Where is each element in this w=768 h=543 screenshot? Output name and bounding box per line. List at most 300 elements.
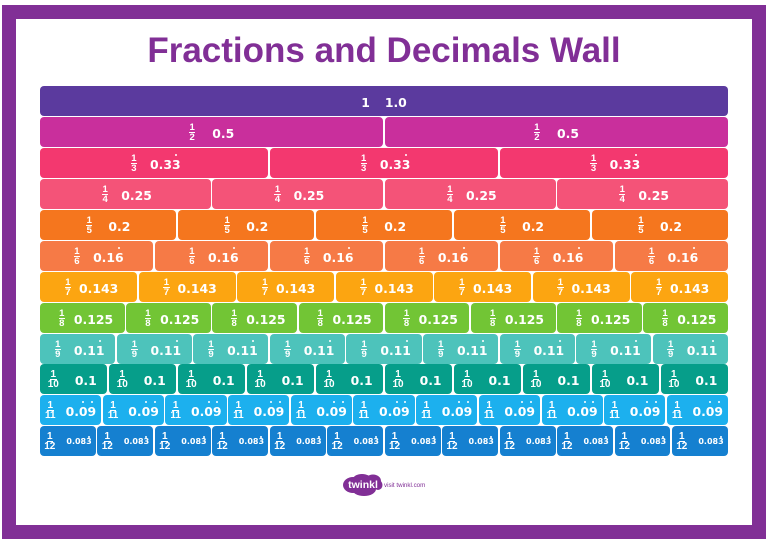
cell: 1/6: 0.16 — [553, 250, 583, 264]
cell: 1/9: 0.11 — [610, 342, 641, 358]
row: eighths — [40, 303, 728, 333]
cell: 1/11: 11 — [609, 410, 620, 420]
cell: 1/12: 12 — [504, 440, 515, 452]
cell: 1/12: 0.083 — [641, 436, 666, 446]
cell: 1/12 — [155, 426, 211, 456]
cell: 1/8: 1 — [404, 308, 409, 318]
cell: 1/5: 0.2 — [522, 218, 544, 234]
cell: 1/12: 12 — [619, 440, 630, 452]
cell: 1/9: 9 — [208, 348, 214, 360]
cell: 1/9 — [423, 334, 498, 364]
cell: 1/5 — [454, 210, 590, 240]
cell: 1/10 — [178, 364, 245, 394]
cell: 1/8: 0.125 — [160, 312, 199, 326]
cell: 1/10 — [592, 364, 659, 394]
cell: 1/6: 1 — [419, 246, 424, 256]
cell: 1/9 — [40, 334, 115, 364]
cell: 1/12 — [385, 426, 441, 456]
cell: 1/8: 1 — [662, 308, 668, 318]
cell: 1/7: 7 — [361, 286, 366, 298]
cell: 1/11: 11 — [484, 410, 494, 420]
cell: 1/12 — [40, 426, 96, 456]
cell: 1/5 — [592, 210, 728, 240]
cell: 1/6: 0.16 — [208, 250, 239, 264]
cell: 1/9: 9 — [362, 348, 367, 360]
row: sevenths — [40, 272, 728, 302]
cell: 1/7: 0.143 — [375, 280, 414, 296]
cell: 1/11: 11 — [421, 410, 432, 420]
cell: 1/4: 0.25 — [294, 188, 324, 202]
cell: 1/8: 0.125 — [332, 312, 372, 326]
cell: 1/3 — [270, 148, 498, 178]
cell: 1/5: 5 — [362, 224, 368, 236]
cell: 1/6: 6 — [419, 256, 424, 266]
cell: 1/11: 1 — [424, 400, 429, 410]
cell: 1/12: 0.083 — [698, 436, 724, 446]
cell: 1/5: 5 — [224, 224, 230, 236]
cell: 1/12: 12 — [561, 440, 572, 452]
cell: 1/10: 1 — [119, 368, 125, 380]
cell: 1/9: 1 — [55, 338, 60, 350]
cell: 1/11: 11 — [108, 410, 118, 420]
cell: 1/12: 1 — [277, 430, 282, 442]
cell: 1/6: 0.16 — [323, 250, 353, 264]
cell: 1/9: 1 — [515, 338, 520, 350]
cell: 1/8 — [126, 303, 211, 333]
cell: 1/9 — [193, 334, 268, 364]
cell: 1/12: 12 — [676, 440, 687, 452]
cell: 1/7: 1 — [558, 276, 563, 288]
cell: 1/10: 0.1 — [351, 372, 373, 388]
cell: 1/9: 0.11 — [74, 342, 104, 358]
icon: logo cloud — [343, 474, 382, 496]
cell: 1/2: 1 — [534, 122, 540, 132]
cell: 1/7: 1 — [459, 276, 465, 288]
cell: 1/6: 1 — [74, 246, 80, 256]
twinkl logo — [343, 474, 425, 496]
cell: 1/11: 11 — [296, 410, 306, 420]
cell: 1/12: 1 — [507, 430, 512, 442]
cell: 1/11: 1 — [486, 400, 492, 410]
cell: 1/10: 1 — [257, 368, 263, 380]
cell: 1/4: 4 — [102, 194, 108, 204]
cell: 1/7: 0.143 — [572, 280, 611, 296]
cell: 1/6: 6 — [189, 256, 194, 266]
cell: 1/12: 12 — [159, 440, 170, 452]
cell: 1/9 — [346, 334, 422, 364]
cell: 1/8 — [643, 303, 728, 333]
cell: 1/5: 1 — [87, 214, 92, 226]
cell: 1/11: 0.09 — [692, 404, 723, 418]
row: ninths — [40, 334, 728, 364]
cell: 1/8: 0.125 — [246, 312, 285, 326]
cell: 1/4 — [212, 179, 383, 209]
cell: 1/9: 0.11 — [304, 342, 334, 358]
cell: 1/3: 3 — [361, 162, 366, 174]
cell: 1/9: 1 — [132, 338, 137, 350]
cell: 1/12: 0.083 — [296, 436, 322, 446]
cell: 1/5: 0.2 — [660, 218, 682, 234]
cell: 1/7 — [138, 272, 236, 302]
cell: 1/8: 8 — [576, 318, 582, 328]
cell: 1/3: 0.33 — [150, 156, 181, 172]
cell: 1/11: 0.09 — [630, 404, 660, 418]
cell: 1/7 — [631, 272, 728, 302]
cell: 1/7 — [237, 272, 334, 302]
cell: 1/5: 1 — [638, 214, 644, 226]
cell: 1/8 — [40, 303, 125, 333]
cell: 1/12: 1 — [219, 430, 225, 442]
cell: 1/2 — [385, 117, 728, 147]
cell: 1/4: 0.25 — [121, 188, 152, 202]
cell: 1: 1 — [361, 94, 370, 110]
cell: 1/6: 6 — [74, 256, 80, 266]
cell: 1/9 — [117, 334, 192, 364]
cell: 1/9: 9 — [132, 348, 137, 360]
cell: 1/11: 1 — [48, 400, 53, 410]
cell: 1/12: 12 — [274, 440, 285, 452]
cell: 1/10: 10 — [530, 378, 541, 390]
cell: 1/8: 1 — [318, 308, 323, 318]
cell: 1: 1.0 — [385, 94, 407, 110]
cell: 1/9: 9 — [668, 348, 673, 360]
cell: 1/9: 9 — [285, 348, 290, 360]
row: one whole — [40, 86, 728, 116]
cell: 1/8: 1 — [576, 308, 582, 318]
cell: 1/7 — [336, 272, 432, 302]
cell: 1/6: 6 — [649, 256, 654, 266]
cell: 1/9: 9 — [55, 348, 60, 360]
cell: 1/6: 0.16 — [668, 250, 698, 264]
cell: 1/2: 2 — [534, 132, 540, 142]
cell: 1/2: 0.5 — [557, 126, 579, 140]
cell: 1/3: 1 — [131, 152, 137, 164]
cell: 1/5: 1 — [224, 214, 230, 226]
cell: 1/4 — [40, 179, 211, 209]
cell: 1/7: 7 — [656, 286, 662, 298]
cell: 1/9 — [653, 334, 728, 364]
cell: 1/12 — [557, 426, 613, 456]
cell: 1/9: 1 — [362, 338, 367, 350]
cell: 1/10: 1 — [464, 368, 470, 380]
cell: 1/11: 1 — [298, 400, 304, 410]
cell: 1/11 — [228, 395, 289, 425]
cell: 1/4: 1 — [447, 184, 453, 194]
cell: 1/11 — [103, 395, 164, 425]
cell: 1/4: 0.25 — [466, 188, 497, 202]
cell: 1/7: 7 — [164, 286, 169, 298]
cell: 1/7: 0.143 — [670, 280, 709, 296]
cell: 1/8 — [212, 303, 297, 333]
row: fifths — [40, 210, 728, 240]
cell: 1/6: 1 — [534, 246, 539, 256]
cell: 1/9 — [500, 334, 575, 364]
cell: 1/7: 1 — [65, 276, 71, 288]
cell: 1/12 — [212, 426, 268, 456]
cell: 1/10 — [109, 364, 176, 394]
cell: 1/12: 12 — [102, 440, 113, 452]
cell: 1/10 — [661, 364, 728, 394]
cell: 1/8: 0.125 — [74, 312, 113, 326]
cell: 1/9: 9 — [438, 348, 443, 360]
cell: 1/11 — [40, 395, 101, 425]
cell: 1/9: 1 — [591, 338, 597, 350]
cell: 1/2 — [40, 117, 383, 147]
cell: 1/11: 0.09 — [316, 404, 347, 418]
cell: 1/12: 1 — [334, 430, 340, 442]
cell: 1/10: 1 — [602, 368, 608, 380]
cell: 1/10: 1 — [671, 368, 677, 380]
cell: 1/12: 1 — [392, 430, 397, 442]
cell: 1/11: 0.09 — [504, 404, 535, 418]
cell: 1/6 — [385, 241, 498, 271]
cell: 1/11: 1 — [173, 400, 178, 410]
cell: 1/12 — [270, 426, 326, 456]
cell: 1/10: 10 — [668, 378, 679, 390]
cell: 1/9 — [576, 334, 651, 364]
cell: 1/12: 0.083 — [526, 436, 551, 446]
row: sixths — [40, 241, 728, 271]
cell: 1/6: 1 — [304, 246, 309, 256]
cell: 1/7: 1 — [164, 276, 169, 288]
cell: 1/10: 1 — [395, 368, 401, 380]
cell: 1/9: 0.11 — [687, 342, 717, 358]
cell: 1/10: 1 — [188, 368, 194, 380]
cell: 1/11: 0.09 — [191, 404, 222, 418]
cell: 1/11: 0.09 — [254, 404, 284, 418]
cell: 1/8: 0.125 — [419, 312, 458, 326]
cell: 1/10: 0.1 — [75, 372, 97, 388]
cell: 1/8: 1 — [59, 308, 64, 318]
cell: 1/8 — [471, 303, 556, 333]
cell: 1/7: 0.143 — [79, 280, 118, 296]
cell: 1/11 — [667, 395, 728, 425]
row: tenths — [40, 364, 728, 394]
cell: 1/11 — [542, 395, 603, 425]
cell: 1/10: 1 — [533, 368, 539, 380]
cell: 1/10: 1 — [50, 368, 56, 380]
cell: 1/7 — [434, 272, 531, 302]
cell: 1/3: 3 — [591, 162, 596, 174]
cell: 1/11: 0.09 — [567, 404, 598, 418]
cell: 1/10: 0.1 — [557, 372, 579, 388]
cell: 1/8: 8 — [662, 318, 668, 328]
cell: 1/12 — [327, 426, 383, 456]
cell: 1/11: 1 — [361, 400, 366, 410]
cell: 1/5: 0.2 — [246, 218, 268, 234]
cell: 1/3: 1 — [361, 152, 366, 164]
cell: 1/6 — [270, 241, 383, 271]
cell: 1/11: 0.09 — [128, 404, 159, 418]
cell: 1/7: 0.143 — [178, 280, 217, 296]
row: halves — [40, 117, 728, 147]
row: elevenths — [40, 395, 728, 425]
cell: 1/5: 0.2 — [384, 218, 406, 234]
cell: 1/12: 0.083 — [239, 436, 264, 446]
cell: 1/8: 0.125 — [505, 312, 544, 326]
cell: 1/6: 0.16 — [438, 250, 468, 264]
cell: 1/5: 0.2 — [108, 218, 130, 234]
cell: 1/12: 1 — [622, 430, 627, 442]
cell: 1/12: 1 — [679, 430, 685, 442]
cell: 1/9: 0.11 — [151, 342, 181, 358]
cell: 1/11: 1 — [549, 400, 555, 410]
title: Fractions and Decimals Wall — [147, 31, 621, 70]
cell: 1/11 — [353, 395, 415, 425]
cell: 1/10: 0.1 — [213, 372, 235, 388]
cell: 1/6 — [615, 241, 728, 271]
cell: 1/9: 0.11 — [380, 342, 411, 358]
cell: 1/11 — [479, 395, 540, 425]
cell: 1/6: 6 — [534, 256, 539, 266]
row: thirds — [40, 148, 728, 178]
cell: 1/10 — [385, 364, 452, 394]
cell: 1/3: 1 — [591, 152, 596, 164]
cell: 1/12: 0.083 — [66, 436, 92, 446]
cell: 1/12: 0.083 — [181, 436, 207, 446]
cell: 1/9: 0.11 — [457, 342, 488, 358]
cell: 1/8: 1 — [145, 308, 151, 318]
cell: 1/7: 7 — [558, 286, 563, 298]
cell: 1/4 — [557, 179, 728, 209]
cell: 1/6 — [155, 241, 268, 271]
cell: 1/7 — [40, 272, 137, 302]
cell: 1/4: 1 — [102, 184, 108, 194]
cell: 1/9: 9 — [515, 348, 520, 360]
cell: 1/5: 1 — [362, 214, 368, 226]
cell: 1/10: 0.1 — [489, 372, 510, 388]
cell: 1/9: 1 — [285, 338, 290, 350]
cell: 1/5 — [178, 210, 314, 240]
cell: 1/10 — [523, 364, 590, 394]
cell: 1/12: 1 — [47, 430, 53, 442]
cell: 1/12: 12 — [446, 440, 458, 452]
cell: 1/3 — [40, 148, 268, 178]
cell: 1/7 — [532, 272, 630, 302]
cell: 1/12: 1 — [449, 430, 455, 442]
logo word: twinkl — [348, 479, 378, 491]
cell: 1/12: 0.083 — [354, 436, 379, 446]
cell: 1/10: 1 — [326, 368, 332, 380]
cell: 1/10: 10 — [599, 378, 610, 390]
cell: 1/11: 0.09 — [379, 404, 410, 418]
cell: 1/8: 1 — [490, 308, 495, 318]
cell: 1/8 — [385, 303, 469, 333]
cell: 1/8: 0.125 — [677, 312, 716, 326]
cell: 1/11 — [165, 395, 227, 425]
cell: 1/11: 0.09 — [66, 404, 96, 418]
cell: 1/6: 6 — [304, 256, 309, 266]
cell: 1/11 — [416, 395, 477, 425]
cell: 1/12: 0.083 — [124, 436, 149, 446]
cell: 1/10 — [247, 364, 314, 394]
cell: 1/3 — [500, 148, 728, 178]
cell: 1/8 — [557, 303, 642, 333]
cell: 1/8: 8 — [145, 318, 151, 328]
cell: 1/9: 0.11 — [534, 342, 564, 358]
cell: 1/3: 0.33 — [380, 156, 410, 172]
cell: 1/8: 8 — [231, 318, 237, 328]
cell: 1/6 — [40, 241, 153, 271]
cell: 1/8: 8 — [59, 318, 64, 328]
cell: 1/12 — [672, 426, 728, 456]
cell: 1/5: 5 — [87, 224, 92, 236]
cell: 1/12 — [97, 426, 153, 456]
cell: 1/4 — [385, 179, 556, 209]
cell: 1/12: 12 — [217, 440, 228, 452]
cell: 1/5: 5 — [500, 224, 506, 236]
cell: 1/4: 4 — [275, 194, 280, 204]
cell: 1/2: 0.5 — [212, 126, 234, 140]
logo link text: visit twinkl.com — [384, 482, 425, 489]
cell: 1/7: 1 — [262, 276, 268, 288]
cell: 1/9: 1 — [208, 338, 214, 350]
cell: 1/11: 11 — [45, 410, 56, 420]
cell: 1/10: 10 — [186, 378, 197, 390]
row: quarters — [40, 179, 728, 209]
cell: 1/4: 0.25 — [638, 188, 669, 202]
cell: 1/12: 1 — [564, 430, 570, 442]
cell: 1/10 — [454, 364, 521, 394]
cell: 1/11: 11 — [358, 410, 369, 420]
cell: 1/10: 0.1 — [420, 372, 442, 388]
cell: 1/12: 0.083 — [411, 436, 436, 446]
cell: 1/4: 4 — [447, 194, 453, 204]
cell: 1/12: 12 — [389, 440, 400, 452]
cell: 1/7: 1 — [656, 276, 662, 288]
cell: 1/11: 11 — [233, 410, 244, 420]
cell: 1/10: 10 — [392, 378, 404, 390]
cell: 1/11: 11 — [170, 410, 181, 420]
cell: 1/9: 1 — [668, 338, 673, 350]
cell: 1/9 — [270, 334, 345, 364]
cell: 1/5: 5 — [638, 224, 644, 236]
cell: 1/12: 1 — [104, 430, 110, 442]
cell: 1/6: 1 — [649, 246, 654, 256]
cell: 1/12: 0.083 — [583, 436, 609, 446]
cell: 1/10: 10 — [324, 378, 335, 390]
cell: 1/7: 1 — [361, 276, 366, 288]
cell: 1/11: 11 — [546, 410, 557, 420]
cell: 1/7: 0.143 — [473, 280, 512, 296]
cell: 1/10: 0.1 — [144, 372, 166, 388]
cell: 1/8: 8 — [404, 318, 409, 328]
cell: 1/10: 0.1 — [282, 372, 304, 388]
cell: 1/11 — [291, 395, 352, 425]
cell: 1/11: 1 — [236, 400, 241, 410]
cell: 1/12 — [615, 426, 670, 456]
cell: 1/11 — [604, 395, 665, 425]
cell: 1/9: 1 — [438, 338, 443, 350]
cell: 1/4: 1 — [620, 184, 625, 194]
cell: 1/10: 0.1 — [695, 372, 717, 388]
cell: 1/10: 10 — [461, 378, 473, 390]
cell: 1/4: 4 — [620, 194, 625, 204]
cell: 1/8: 0.125 — [591, 312, 630, 326]
cell: 1/12: 1 — [162, 430, 168, 442]
cell: 1/11: 0.09 — [442, 404, 472, 418]
cell: 1/5: 1 — [500, 214, 506, 226]
cell: 1/12: 0.083 — [469, 436, 494, 446]
cell: 1/3: 0.33 — [610, 156, 640, 172]
cell: 1 — [40, 86, 728, 116]
cell: 1/11: 11 — [672, 410, 682, 420]
cell: 1/3: 3 — [131, 162, 137, 174]
cell: 1/6 — [500, 241, 613, 271]
cell: 1/4: 1 — [275, 184, 280, 194]
cell: 1/12: 12 — [332, 440, 343, 452]
cell: 1/12: 12 — [44, 440, 55, 452]
